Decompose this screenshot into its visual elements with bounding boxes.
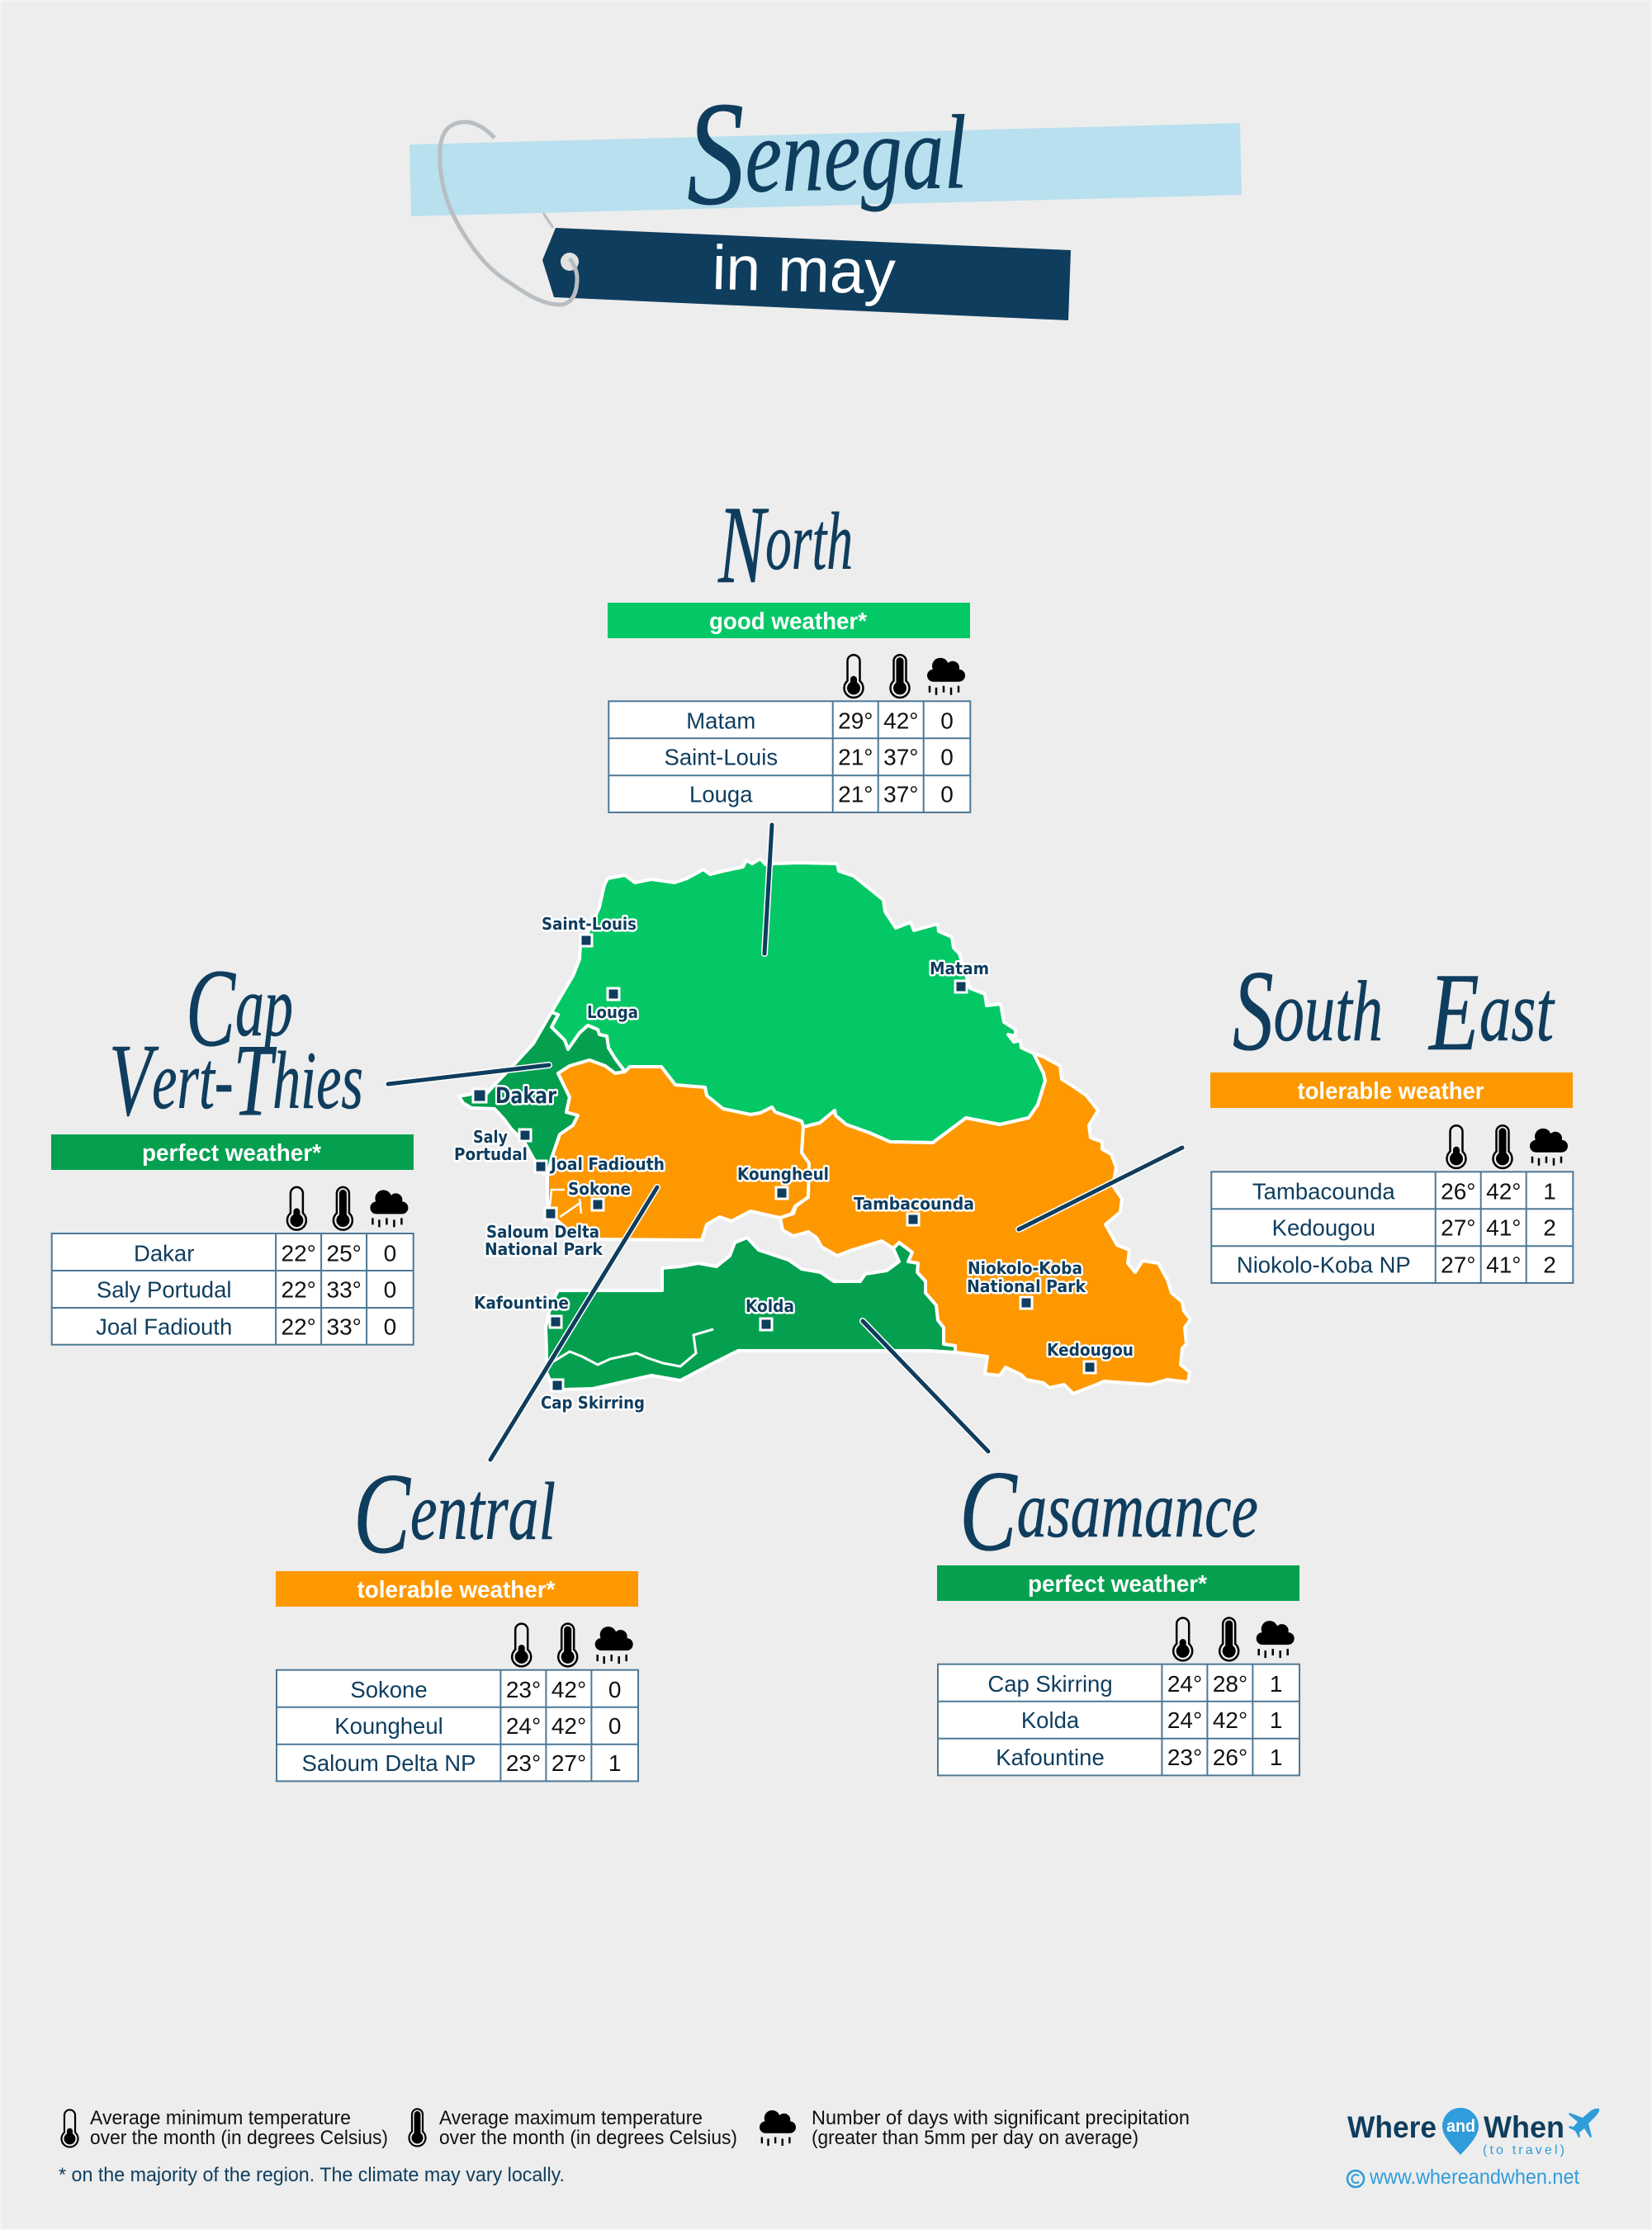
table: Cap Vert-Thies xyxy=(52,1187,414,1345)
table: Casamance: 24° xyxy=(1167,1707,1202,1733)
table: Casamance: 28° xyxy=(1213,1671,1247,1697)
region: North xyxy=(551,859,1045,1143)
table: North: Matam xyxy=(686,708,755,734)
label: Kafountine: Kafountine xyxy=(474,1293,569,1313)
marker: Louga xyxy=(608,988,619,1000)
label: Louga: Louga xyxy=(587,1002,638,1022)
leader line: North xyxy=(764,825,772,954)
leader line: Casamance xyxy=(863,1321,988,1451)
table: Cap Vert-Thies: Dakar xyxy=(134,1240,194,1266)
table: North: 0 xyxy=(940,708,954,734)
table: Casamance: 1 xyxy=(1270,1671,1282,1697)
table: North: 0 xyxy=(940,745,954,770)
footnote: * on the majority of the region. The climate may vary locally. xyxy=(59,2164,565,2186)
logo text: to travel: (to travel) xyxy=(1483,2143,1564,2157)
river casamance xyxy=(548,1329,713,1366)
heading: Central: C xyxy=(353,1450,411,1578)
icon: map pin xyxy=(1442,2108,1479,2155)
table: South East: 41° xyxy=(1486,1215,1521,1241)
weather bar: Cap Vert-Thies: perfect weather* xyxy=(142,1140,322,1167)
legend text: min temperature: over the month (in degrees Celsius) xyxy=(90,2127,388,2149)
logo text: Where: Where xyxy=(1347,2110,1437,2144)
map of Senegal xyxy=(454,859,1190,1413)
table: South East: 42° xyxy=(1486,1179,1521,1205)
weather bar: Cap Vert-Thies xyxy=(51,1134,414,1170)
table: Casamance: Kafountine xyxy=(996,1745,1105,1770)
label: Matam: Matam xyxy=(930,959,989,978)
legend xyxy=(59,2107,1190,2186)
marker: Saly Portudal xyxy=(519,1129,531,1141)
label: Portudal: Portudal xyxy=(454,1144,528,1164)
table: Central: 1 xyxy=(608,1750,621,1776)
table: Casamance xyxy=(938,1618,1299,1775)
heading: South East: S xyxy=(1233,947,1274,1075)
table: Casamance: 1 xyxy=(1270,1745,1282,1770)
table: Cap Vert-Thies: 0 xyxy=(384,1314,396,1339)
panel: South East xyxy=(1210,947,1573,1283)
leader line: Central xyxy=(490,1187,657,1460)
icon: min thermometer xyxy=(61,2109,78,2147)
table: South East: Niokolo-Koba NP xyxy=(1237,1252,1411,1278)
table: South East: 41° xyxy=(1486,1252,1521,1278)
table: North: 37° xyxy=(883,745,918,770)
logo: Where and When xyxy=(1347,2108,1599,2189)
title: Senegal: enegal xyxy=(744,93,968,215)
leader line: South East xyxy=(1019,1148,1182,1229)
weather bar: North: good weather* xyxy=(709,608,868,635)
legend text: min temperature xyxy=(90,2107,388,2149)
marker: Kafountine xyxy=(550,1316,561,1328)
label: Tambacounda: Tambacounda xyxy=(854,1194,974,1214)
label: Saly: Saly xyxy=(473,1127,508,1147)
legend text: precipitation xyxy=(812,2107,1190,2149)
icon: max thermometer xyxy=(409,2109,426,2146)
panel: Casamance xyxy=(937,1447,1299,1775)
table: North: 21° xyxy=(838,782,873,807)
region: Casamance xyxy=(546,1238,955,1390)
table: Central: 0 xyxy=(608,1713,621,1739)
label: Koungheul: Koungheul xyxy=(737,1164,829,1184)
table: Cap Vert-Thies: 22° xyxy=(282,1240,316,1266)
table: North: Saint-Louis xyxy=(665,745,778,770)
region: South East xyxy=(780,1053,1190,1394)
marker: Kolda xyxy=(760,1319,772,1330)
saloum delta rivers xyxy=(550,1190,581,1217)
table: Central xyxy=(277,1624,638,1781)
label: Kolda: Kolda xyxy=(746,1296,794,1316)
table: South East: 27° xyxy=(1441,1215,1475,1241)
region: Central xyxy=(547,1060,810,1240)
weather bar: Casamance: perfect weather* xyxy=(1028,1571,1208,1598)
table: Central: 27° xyxy=(551,1750,586,1776)
table: North: Louga xyxy=(689,782,753,807)
table: Central: Saloum Delta NP xyxy=(302,1750,476,1776)
tag string xyxy=(543,213,553,228)
table: South East: 1 xyxy=(1543,1179,1556,1205)
heading: South East: ast xyxy=(1479,963,1555,1059)
weather bar: North xyxy=(608,603,970,638)
table: Central: 42° xyxy=(551,1713,586,1739)
dark tag xyxy=(542,228,1071,320)
table: South East: 27° xyxy=(1441,1252,1475,1278)
table: North: 37° xyxy=(883,782,918,807)
marker: Saint-Louis xyxy=(580,935,592,946)
table: Central: 24° xyxy=(506,1713,541,1739)
table: Central: Sokone xyxy=(350,1677,428,1702)
table: Cap Vert-Thies: 33° xyxy=(327,1276,362,1302)
table: North: 21° xyxy=(838,745,873,770)
table: Cap Vert-Thies: 33° xyxy=(327,1314,362,1339)
region: Cap Vert-Thies xyxy=(459,1012,625,1177)
marker: Joal Fadiouth xyxy=(535,1161,547,1172)
table: Central: Koungheul xyxy=(334,1713,443,1739)
legend text: precipitation: (greater than 5mm per day on average) xyxy=(812,2127,1138,2149)
heading: Central: entral xyxy=(410,1465,556,1557)
weather bar: Central: tolerable weather* xyxy=(357,1577,556,1603)
heading: South East: outh xyxy=(1274,963,1383,1059)
label: National Park: National Park xyxy=(485,1239,604,1259)
label: Niokolo-Koba: Niokolo-Koba xyxy=(968,1258,1082,1278)
legend text: min temperature: Average minimum temperature xyxy=(90,2107,351,2129)
table: Central: 23° xyxy=(506,1750,541,1776)
panel: Central xyxy=(276,1450,638,1781)
table: South East: 2 xyxy=(1543,1252,1556,1278)
logo text: and: and xyxy=(1446,2117,1475,2136)
title: Senegal: S xyxy=(684,71,746,236)
table: Casamance: 24° xyxy=(1167,1671,1202,1697)
table: Casamance: 23° xyxy=(1167,1745,1202,1770)
label: Saloum Delta: Saloum Delta xyxy=(486,1222,599,1242)
heading: Vert-Thies: T xyxy=(234,1024,277,1138)
table: Casamance: Cap Skirring xyxy=(987,1671,1113,1697)
table: Cap Vert-Thies: Joal Fadiouth xyxy=(96,1314,232,1339)
label: Joal Fadiouth: Joal Fadiouth xyxy=(549,1154,665,1174)
table: Casamance: Kolda xyxy=(1021,1707,1080,1733)
marker: Dakar xyxy=(473,1089,486,1102)
icon: plane xyxy=(1569,2109,1599,2138)
marker: Matam xyxy=(955,981,967,992)
marker: Koungheul xyxy=(776,1187,788,1199)
table: Cap Vert-Thies: 0 xyxy=(384,1240,396,1266)
table: North: 42° xyxy=(883,708,918,734)
title banner xyxy=(409,67,1242,320)
logo text: When: When xyxy=(1484,2110,1564,2144)
table: Cap Vert-Thies: 25° xyxy=(327,1240,362,1266)
label: Sokone: Sokone xyxy=(568,1179,631,1199)
heading: North: N xyxy=(717,484,769,607)
marker: Kedougou xyxy=(1084,1361,1096,1373)
label: National Park (Niokolo): National Park xyxy=(967,1276,1086,1296)
heading: Cap: C xyxy=(186,947,236,1070)
label: Saint-Louis: Saint-Louis xyxy=(542,914,637,934)
marker: Niokolo-Koba xyxy=(1020,1297,1032,1309)
table: South East: 2 xyxy=(1543,1215,1556,1241)
table: Casamance: 1 xyxy=(1270,1707,1282,1733)
heading: North: orth xyxy=(765,495,853,587)
weather bar: Casamance xyxy=(937,1565,1299,1601)
table: South East: 26° xyxy=(1441,1179,1475,1205)
table: South East: Tambacounda xyxy=(1252,1179,1395,1205)
table: Casamance: 42° xyxy=(1213,1707,1247,1733)
tag ring xyxy=(440,122,577,305)
marker: Saloum Delta xyxy=(545,1208,556,1219)
heading: South East: E xyxy=(1428,951,1479,1074)
table: North xyxy=(608,655,970,812)
heading: Casamance: C xyxy=(959,1447,1018,1575)
marker: Cap Skirring xyxy=(551,1380,563,1391)
label: Dakar: Dakar xyxy=(495,1083,557,1109)
heading: South East xyxy=(1233,947,1555,1075)
weather bar: Central xyxy=(276,1571,638,1607)
legend text: max temperature: over the month (in degrees Celsius) xyxy=(439,2127,737,2149)
icon: rain cloud xyxy=(760,2110,796,2146)
logo url: www.whereandwhen.net xyxy=(1369,2166,1579,2189)
label: Kedougou: Kedougou xyxy=(1047,1340,1134,1360)
heading: Casamance: asamance xyxy=(1017,1465,1258,1555)
panel: Cap Vert-Thies xyxy=(51,947,414,1345)
leader line: Cap Vert-Thies xyxy=(388,1065,549,1084)
table: Cap Vert-Thies: 22° xyxy=(282,1276,316,1302)
marker: Tambacounda xyxy=(907,1214,919,1225)
weather bar: South East: tolerable weather xyxy=(1298,1078,1484,1105)
table: Central: 23° xyxy=(506,1677,541,1702)
label: Cap Skirring: Cap Skirring xyxy=(541,1393,645,1413)
table: Casamance: 26° xyxy=(1213,1745,1247,1770)
table: North: 29° xyxy=(838,708,873,734)
table: Cap Vert-Thies: 22° xyxy=(282,1314,316,1339)
heading: Vert-Thies: ert- xyxy=(152,1035,234,1126)
subtitle: in may: in may xyxy=(712,233,897,308)
icon: copyright xyxy=(1347,2171,1364,2187)
heading: Vert-Thies: V xyxy=(109,1024,159,1138)
table: South East: Kedougou xyxy=(1272,1215,1375,1241)
marker: Sokone xyxy=(592,1199,604,1210)
table: Cap Vert-Thies: Saly Portudal xyxy=(97,1276,231,1302)
weather bar: South East xyxy=(1210,1072,1573,1108)
heading: Vert-Thies: hies xyxy=(272,1035,363,1126)
legend text: max temperature xyxy=(439,2107,737,2149)
table: Cap Vert-Thies: 0 xyxy=(384,1276,396,1302)
table: South East xyxy=(1211,1125,1573,1283)
legend text: precipitation: Number of days with significant precipitation xyxy=(812,2107,1190,2129)
heading: Cap: ap xyxy=(235,958,293,1054)
panel: North xyxy=(608,484,970,812)
table: North: 0 xyxy=(940,782,954,807)
table: Central: 0 xyxy=(608,1677,621,1702)
table: Central: 42° xyxy=(551,1677,586,1702)
tag hole xyxy=(561,253,579,271)
light blue band xyxy=(409,123,1242,216)
legend text: max temperature: Average maximum temperature xyxy=(439,2107,703,2129)
